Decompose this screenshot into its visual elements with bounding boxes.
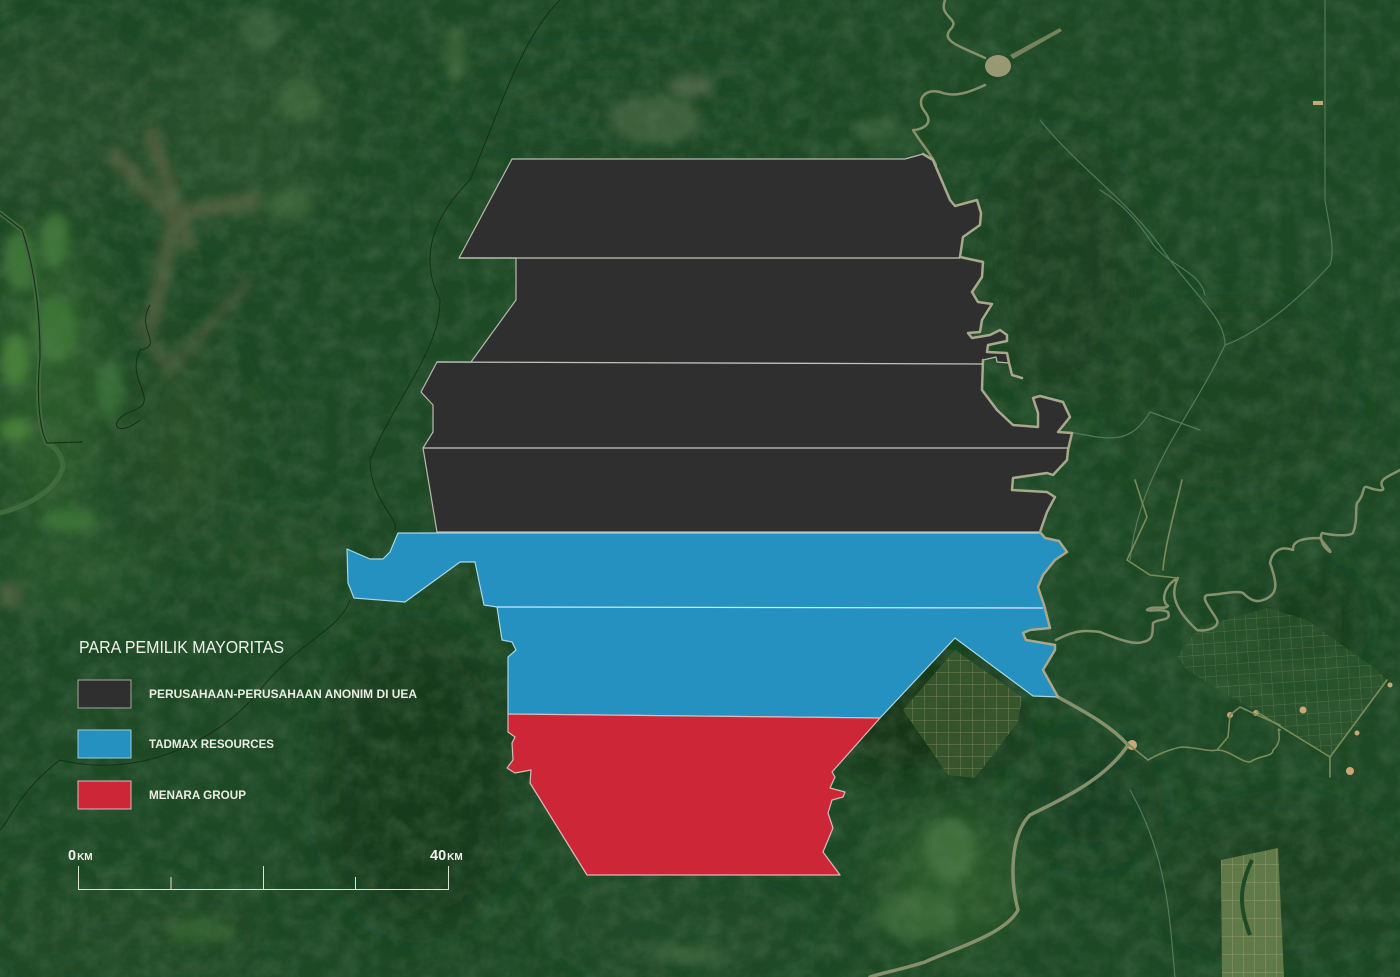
legend item: UAE anonymous companies: PERUSAHAAN-PERUSAHAAN ANONIM DI UEA <box>149 687 417 701</box>
concession: Tadmax Resources (blue) <box>347 533 1067 718</box>
town: north settlement <box>985 28 1062 77</box>
legend title: PARA PEMILIK MAYORITAS <box>79 637 284 657</box>
concession: Menara Group (red) <box>507 714 880 875</box>
concession dividers <box>423 258 1068 608</box>
legend item: Tadmax Resources <box>78 730 274 758</box>
plantation: bright clearing marks <box>1127 101 1392 775</box>
scale bar <box>68 848 463 890</box>
plantation: right-centre block <box>1177 608 1387 757</box>
northern meander <box>913 85 985 165</box>
legend item: UAE anonymous companies <box>78 680 417 708</box>
legend <box>78 637 417 809</box>
western river channel <box>0 213 82 443</box>
western river <box>0 213 63 513</box>
legend item: Menara Group <box>78 781 246 809</box>
river bank along concession edge <box>923 154 1072 697</box>
top meander <box>944 0 985 58</box>
scale label: 40 km: 40KM <box>430 848 463 864</box>
scale ruler <box>78 866 448 890</box>
dark boundary streams <box>0 0 560 830</box>
plantation: bottom-right block <box>1221 848 1284 977</box>
concession: UAE anonymous companies (dark) <box>421 154 1072 532</box>
tributaries, tracks and roads <box>1040 0 1332 977</box>
main river south <box>870 697 1128 977</box>
eastern river <box>1056 470 1400 643</box>
legend item: Menara Group: MENARA GROUP <box>149 788 246 802</box>
concession polygons <box>347 154 1072 875</box>
scale label: 0 km: 0KM <box>68 848 93 864</box>
plantation: central diamond <box>903 650 1022 778</box>
legend item: Tadmax Resources: TADMAX RESOURCES <box>149 737 274 751</box>
